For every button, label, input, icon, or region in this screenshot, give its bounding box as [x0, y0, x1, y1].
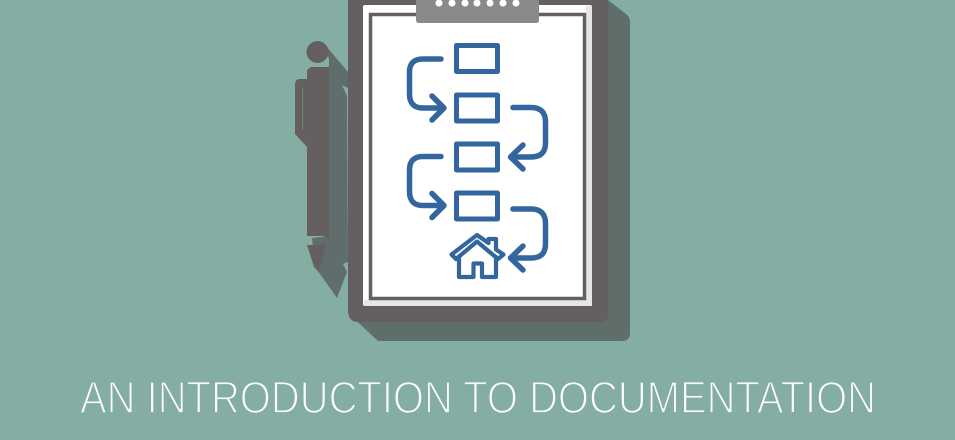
icon: house	[452, 235, 504, 277]
clipboard shadow	[348, 0, 630, 341]
icon: pen with shadow	[295, 41, 348, 298]
icon: clipboard	[348, 0, 630, 341]
step box 2	[456, 95, 498, 121]
arrow: box 3 to box 4	[410, 156, 444, 218]
step box 1	[456, 46, 498, 72]
arrow: box 2 to box 3	[510, 108, 546, 169]
clipboard clip	[416, 0, 539, 23]
arrow: box 1 to box 2	[410, 59, 444, 120]
flowchart	[410, 46, 546, 277]
step box 3	[456, 144, 498, 170]
arrow: box 4 to home	[510, 209, 546, 270]
clipboard board	[348, 0, 608, 322]
step box 4	[456, 193, 498, 219]
paper sheet	[363, 5, 592, 306]
